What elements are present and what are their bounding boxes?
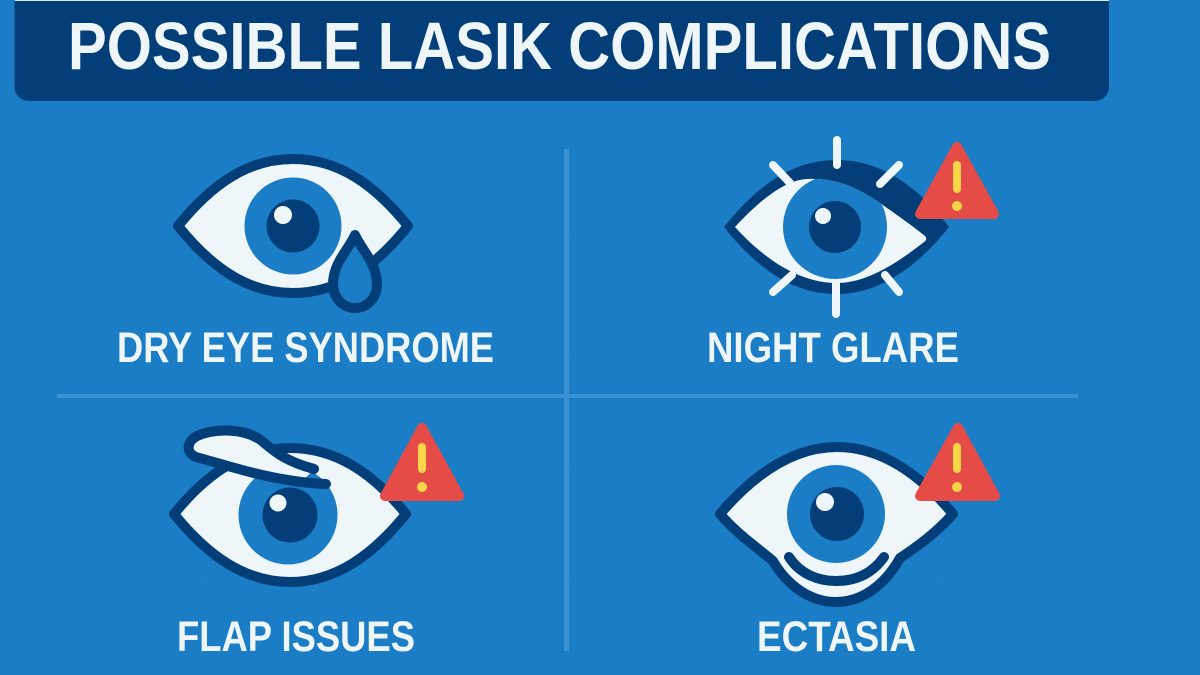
panel: flap issues — [174, 428, 459, 661]
icon: warning triangle — [385, 428, 459, 496]
label: night glare: NIGHT GLARE — [707, 324, 959, 372]
label: ectasia: ECTASIA — [757, 613, 916, 661]
icon: warning triangle — [920, 428, 995, 496]
icon: eye with bulging cornea — [720, 447, 953, 602]
icon: eye with tear drop — [178, 159, 408, 308]
panel: ectasia — [720, 428, 995, 661]
panel: night glare — [707, 140, 994, 372]
panel: dry eye syndrome — [117, 159, 494, 372]
icon: eye with glare rays — [724, 140, 949, 314]
label: flap issues: FLAP ISSUES — [177, 613, 415, 661]
header banner — [14, 0, 1109, 101]
label: dry eye syndrome: DRY EYE SYNDROME — [117, 324, 494, 372]
title: POSSIBLE LASIK COMPLICATIONS — [68, 9, 1051, 84]
vertical divider — [564, 149, 569, 651]
icon: warning triangle — [920, 147, 994, 214]
icon: eye with corneal flap — [174, 431, 406, 582]
horizontal divider — [57, 394, 1078, 398]
